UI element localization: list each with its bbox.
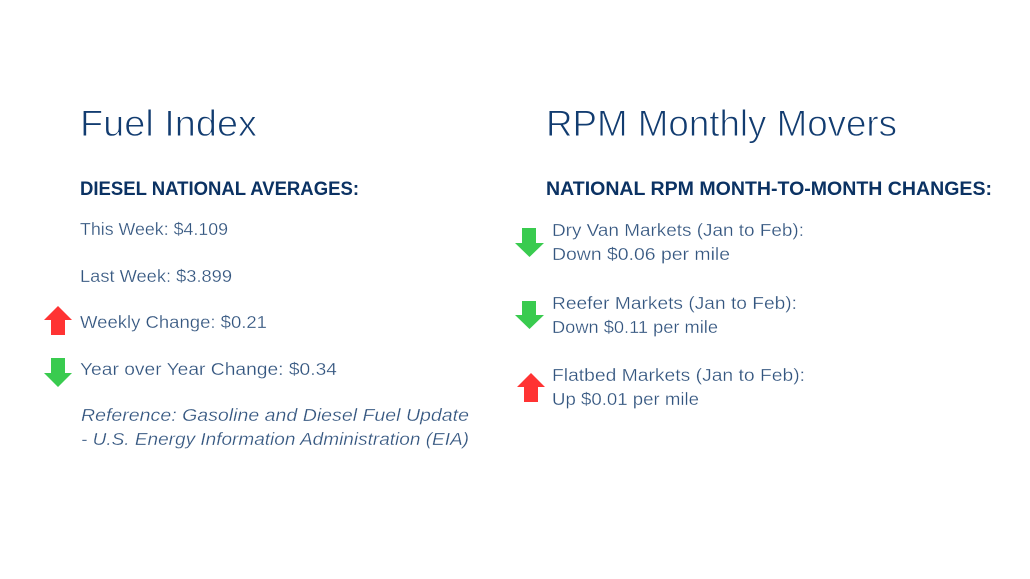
text: reefer markets [552,293,797,337]
icon: green down arrow dry van [515,228,544,257]
icon: green down arrow year over year [44,358,72,387]
text: reference note: Reference: Gasoline and Diesel Fuel Update [81,405,469,425]
title: Fuel Index: Fuel Index [80,103,257,144]
icon: green down arrow reefer [515,301,544,329]
text: dry van markets: Down $0.06 per mile [552,244,730,264]
text: dry van markets: Dry Van Markets (Jan to Feb): [552,220,804,240]
panel: fuel index [44,103,469,449]
text: dry van markets [552,220,804,264]
icon: red up arrow weekly change [44,306,72,335]
panel: rpm monthly movers [515,103,992,409]
text: reefer markets: Reefer Markets (Jan to Feb): [552,293,797,313]
text: reference note: - U.S. Energy Information Administration (EIA) [81,429,469,449]
text: reefer markets: Down $0.11 per mile [552,317,718,337]
heading: national rpm changes: NATIONAL RPM MONTH-TO-MONTH CHANGES: [546,179,992,200]
text: weekly change: Weekly Change: $0.21 [80,312,267,332]
text: flatbed markets: Up $0.01 per mile [552,389,699,409]
text: last week: Last Week: $3.899 [80,266,232,286]
icon: red up arrow flatbed [517,373,545,402]
text: this week: This Week: $4.109 [80,219,228,239]
text: reference note [81,405,469,449]
heading: diesel national averages: DIESEL NATIONAL AVERAGES: [80,179,359,200]
text: flatbed markets: Flatbed Markets (Jan to Feb): [552,365,805,385]
title: RPM Monthly Movers: RPM Monthly Movers [546,103,897,144]
text: year over year change: Year over Year Change: $0.34 [80,359,337,379]
text: flatbed markets [552,365,805,409]
